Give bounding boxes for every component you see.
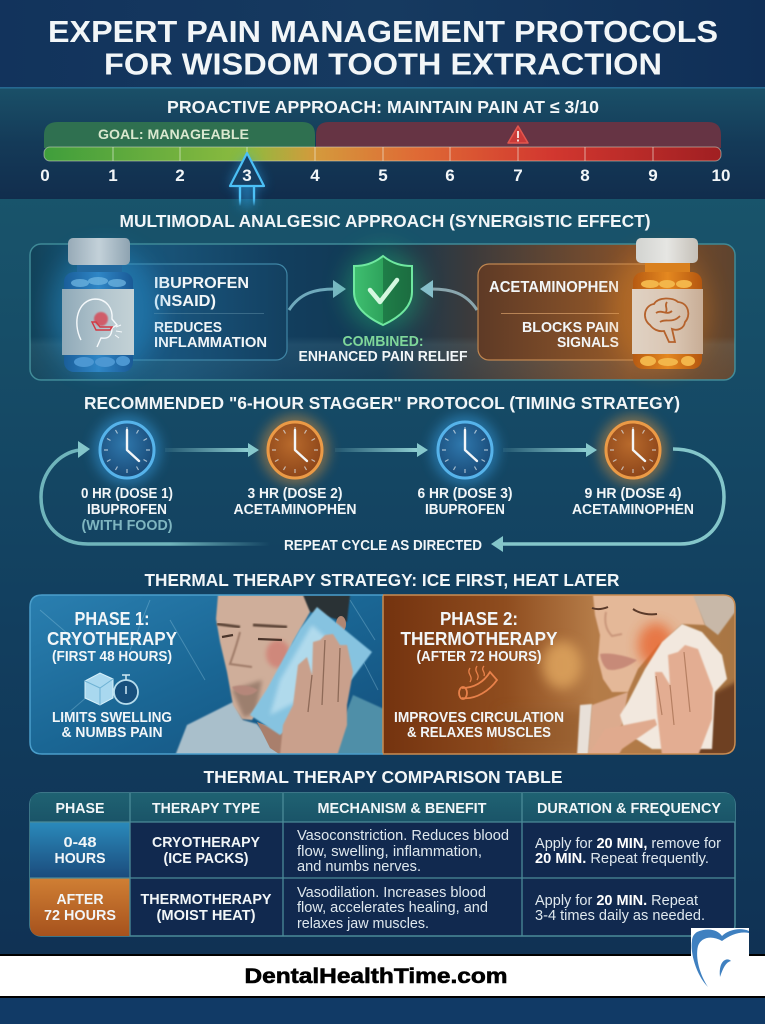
photo: man with ice pack xyxy=(175,595,384,756)
acetaminophen card: ACETAMINOPHEN xyxy=(489,279,619,296)
goal band: GOAL: MANAGEABLE xyxy=(98,126,249,142)
row: cryotherapy: flow, swelling, inflammation, xyxy=(297,844,482,860)
goal band xyxy=(44,122,315,148)
icon: clock dose 1 xyxy=(93,415,161,485)
row: thermotherapy: relaxes jaw muscles. xyxy=(297,916,429,932)
heading: stagger protocol: RECOMMENDED "6-HOUR STAGGER" PROTOCOL (TIMING STRATEGY) xyxy=(84,393,680,413)
phase cell: after 72 hours: AFTER xyxy=(56,891,104,908)
arrow: pointer at 3: 3 xyxy=(242,166,252,185)
scale numbers: 7 xyxy=(513,166,523,185)
phase 2 text: & RELAXES MUSCLES xyxy=(407,724,551,741)
row: cryotherapy: 20 MIN. Repeat frequently. xyxy=(535,851,709,867)
arrow: acetaminophen to shield xyxy=(420,280,477,310)
panel: multimodal analgesic xyxy=(30,238,735,380)
combined label: COMBINED: xyxy=(342,333,424,350)
dose 2 label: 3 HR (DOSE 2) xyxy=(248,486,343,502)
phase 2 text: (AFTER 72 HOURS) xyxy=(416,648,542,665)
scale numbers: 4 xyxy=(310,166,320,185)
dose 3 label xyxy=(418,486,513,518)
dose 1 label xyxy=(81,486,173,534)
row: cryotherapy: CRYOTHERAPY xyxy=(152,834,260,851)
phase cell: after 72 hours xyxy=(30,878,130,936)
ibuprofen card: REDUCES xyxy=(154,319,222,336)
row: thermotherapy: THERMOTHERAPY xyxy=(140,891,272,908)
pain scale bar xyxy=(44,147,721,161)
acetaminophen card: SIGNALS xyxy=(557,334,619,351)
ibuprofen card: IBUPROFEN xyxy=(154,275,249,292)
row: thermotherapy: Apply for 20 MIN. Repeat xyxy=(535,893,698,909)
row: thermotherapy: flow, accelerates healing, and xyxy=(297,900,488,916)
row: thermotherapy: (MOIST HEAT) xyxy=(156,907,256,924)
arrow: dose 1 to dose 2 xyxy=(165,443,259,457)
phase 1 text: & NUMBS PAIN xyxy=(62,724,162,741)
dose 1 label: 0 HR (DOSE 1) xyxy=(81,486,173,502)
icon: clock dose 4 xyxy=(599,415,667,485)
combined label: ENHANCED PAIN RELIEF xyxy=(298,348,468,365)
icon: clock dose 3 xyxy=(431,415,499,485)
scale numbers: 0 xyxy=(40,166,50,185)
scale numbers: 5 xyxy=(378,166,388,185)
phase cell: 0-48 hours: HOURS xyxy=(54,850,106,867)
phase 1 text xyxy=(47,609,177,741)
panel outline: phase 1 xyxy=(30,595,383,754)
arrow: pointer at 3 xyxy=(229,153,265,206)
phase cell: after 72 hours: 72 HOURS xyxy=(44,907,116,924)
panel outlines xyxy=(383,595,735,754)
row: cryotherapy: Vasoconstriction. Reduces blood xyxy=(297,828,509,844)
icon: tooth logo xyxy=(691,928,749,996)
footer band xyxy=(0,954,765,1024)
combined label xyxy=(298,333,468,365)
panel: comparison table xyxy=(30,793,735,936)
table header row: THERAPY TYPE xyxy=(152,800,260,817)
warning band xyxy=(316,122,721,148)
ibuprofen card: (NSAID) xyxy=(154,293,216,310)
ibuprofen card: INFLAMMATION xyxy=(154,334,267,351)
icon: orange pill bottle xyxy=(610,238,710,370)
dose 4 label: 9 HR (DOSE 4) xyxy=(584,486,682,502)
title banner: FOR WISDOM TOOTH EXTRACTION xyxy=(104,46,662,82)
table header row: MECHANISM & BENEFIT xyxy=(318,800,486,817)
heading: proactive approach: PROACTIVE APPROACH: MAINTAIN PAIN AT ≤ 3/10 xyxy=(167,97,599,117)
scale numbers: 2 xyxy=(175,166,185,185)
title banner: EXPERT PAIN MANAGEMENT PROTOCOLS xyxy=(48,14,718,49)
scale numbers: 10 xyxy=(712,166,730,185)
table header row: DURATION & FREQUENCY xyxy=(537,800,721,817)
row: thermotherapy: 3-4 times daily as needed. xyxy=(535,908,705,924)
repeat cycle label: REPEAT CYCLE AS DIRECTED xyxy=(284,538,482,554)
scale numbers xyxy=(40,166,730,185)
phase 1 text: (FIRST 48 HOURS) xyxy=(52,648,172,665)
icon: blue pill bottle xyxy=(50,238,160,372)
dose 4 label: ACETAMINOPHEN xyxy=(572,502,694,518)
phase 2 text: THERMOTHERAPY xyxy=(400,629,558,649)
table header row xyxy=(30,793,735,822)
phase 1 text: CRYOTHERAPY xyxy=(47,629,177,649)
row: cryotherapy: and numbs nerves. xyxy=(297,859,421,875)
heading: thermal therapy strategy: THERMAL THERAPY STRATEGY: ICE FIRST, HEAT LATER xyxy=(144,570,620,590)
acetaminophen card xyxy=(478,264,658,360)
grid lines xyxy=(30,793,735,936)
table header row: PHASE xyxy=(56,800,104,817)
phase cell: 0-48 hours: 0-48 xyxy=(64,834,96,851)
arrow: dose 3 to dose 4 xyxy=(503,443,597,457)
panel: pain scale xyxy=(0,87,765,206)
phase 2 text: IMPROVES CIRCULATION xyxy=(394,709,564,726)
scale numbers: 8 xyxy=(580,166,590,185)
icon: warning triangle xyxy=(508,126,528,143)
row: cryotherapy: Apply for 20 MIN, remove for xyxy=(535,836,721,852)
arrow: ibuprofen to shield xyxy=(289,280,346,310)
scale numbers: 1 xyxy=(108,166,118,185)
scale numbers: 9 xyxy=(648,166,658,185)
acetaminophen card: BLOCKS PAIN xyxy=(522,319,619,336)
phase 1 text: LIMITS SWELLING xyxy=(52,709,172,726)
ibuprofen card xyxy=(110,264,287,360)
dose 3 label: 6 HR (DOSE 3) xyxy=(418,486,513,502)
row: thermotherapy: Vasodilation. Increases blood xyxy=(297,885,486,901)
dose 2 label: ACETAMINOPHEN xyxy=(234,502,356,518)
dose 4 label xyxy=(572,486,694,518)
phase cell: 0-48 hours xyxy=(30,822,130,878)
arrow: repeat loop left xyxy=(41,441,270,544)
title banner xyxy=(0,0,765,88)
heading: comparison table: THERMAL THERAPY COMPARISON TABLE xyxy=(204,767,562,787)
icon: ice cube and stopwatch xyxy=(85,673,138,705)
row: cryotherapy: (ICE PACKS) xyxy=(164,850,248,867)
photo: woman with warm towel xyxy=(530,596,734,754)
dose 2 label xyxy=(234,486,356,518)
row: thermotherapy xyxy=(140,885,705,932)
arrow: repeat loop right xyxy=(491,449,724,552)
phase 2 text: PHASE 2: xyxy=(440,609,518,629)
panel: phase 2 thermotherapy xyxy=(383,595,740,756)
icon: blood vessel with heat waves xyxy=(459,666,497,699)
dose 3 label: IBUPROFEN xyxy=(425,502,505,518)
dose 1 label: (WITH FOOD) xyxy=(82,518,173,534)
icon: clock dose 2 xyxy=(261,415,329,485)
row: cryotherapy xyxy=(152,828,721,875)
icon: green shield with check xyxy=(345,248,421,332)
phase 1 text: PHASE 1: xyxy=(74,609,150,629)
panel: phase 1 cryotherapy xyxy=(30,595,384,756)
footer band: DentalHealthTime.com xyxy=(244,965,508,988)
heading: multimodal: MULTIMODAL ANALGESIC APPROACH (SYNERGISTIC EFFECT) xyxy=(120,211,650,231)
scale numbers: 6 xyxy=(445,166,455,185)
phase 2 text xyxy=(394,609,564,741)
panel: dose timeline xyxy=(41,415,724,554)
arrow: dose 2 to dose 3 xyxy=(335,443,428,457)
dose 1 label: IBUPROFEN xyxy=(87,502,167,518)
